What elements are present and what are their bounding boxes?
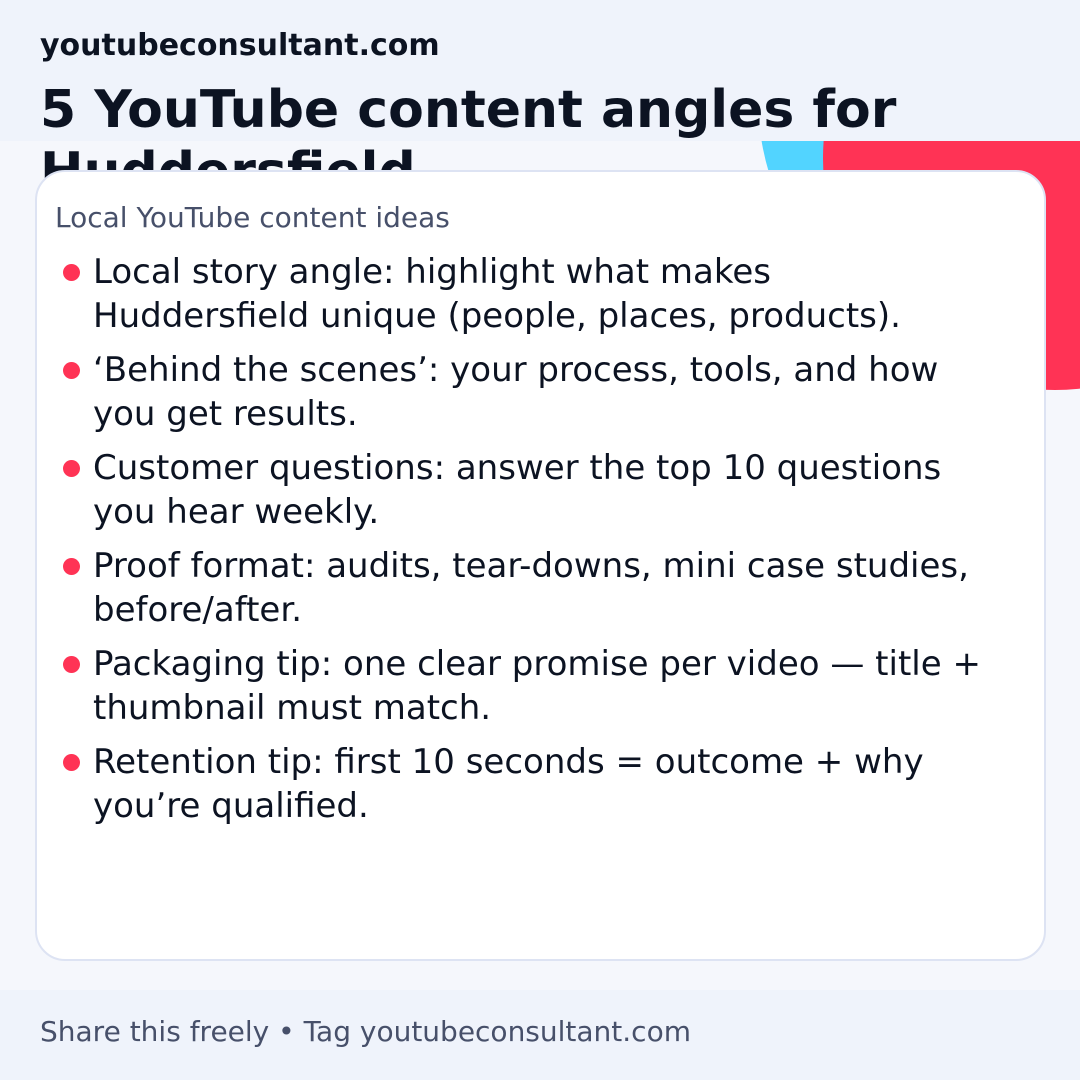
decorative circles [762,141,1080,390]
subtitle: Local YouTube content ideas [55,201,450,234]
item 6: Retention tip: first 10 seconds = outcome + why you’re qualified. [93,742,924,826]
item 5: Packaging tip: one clear promise per video — title + thumbnail must match. [93,644,981,728]
item 2: ‘Behind the scenes’: your process, tools, and how you get results. [93,350,938,434]
item 1: Local story angle: highlight what makes Huddersfield unique (people, places, products). [93,252,901,336]
item 4: Proof format: audits, tear-downs, mini case studies, before/after. [93,546,969,630]
panel: content ideas card [35,170,1046,961]
title: 5 YouTube content angles for Huddersfield [40,80,896,202]
brand: youtubeconsultant.com [40,28,440,63]
item 3: Customer questions: answer the top 10 questions you hear weekly. [93,448,941,532]
footer text: Share this freely • Tag youtubeconsultant.com [40,1015,691,1048]
